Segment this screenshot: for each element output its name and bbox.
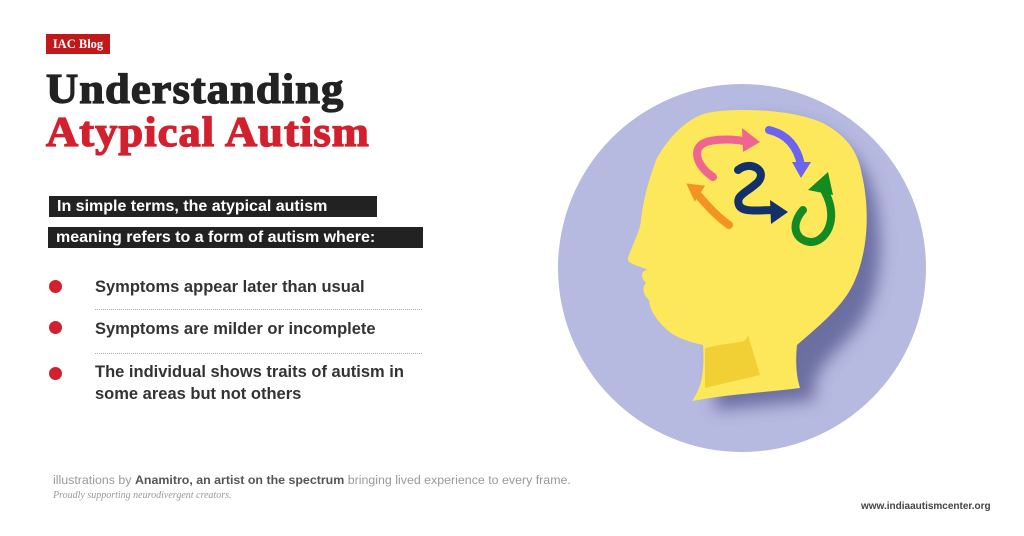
intro label: In simple terms, the atypical autism	[57, 198, 327, 215]
bullet list: Symptoms appear later than usual	[95, 278, 365, 296]
intro label: meaning refers to a form of autism where:	[56, 229, 375, 246]
badge: IAC Blog	[53, 37, 103, 51]
bullet list: The individual shows traits of autism in	[95, 363, 404, 381]
footer credit	[53, 473, 571, 501]
bullet list: Symptoms are milder or incomplete	[95, 320, 376, 338]
title	[46, 67, 370, 156]
bullet list: some areas but not others	[95, 385, 301, 403]
title: Understanding	[46, 67, 344, 113]
intro label	[48, 196, 423, 248]
footer credit: Proudly supporting neurodivergent creators.	[53, 490, 232, 501]
website url: www.indiaautismcenter.org	[861, 501, 991, 512]
bullet list	[49, 278, 422, 403]
title: Atypical Autism	[46, 110, 370, 156]
badge	[46, 34, 110, 54]
footer credit: illustrations by Anamitro, an artist on the spectrum bringing lived experience to every frame.	[53, 473, 571, 487]
